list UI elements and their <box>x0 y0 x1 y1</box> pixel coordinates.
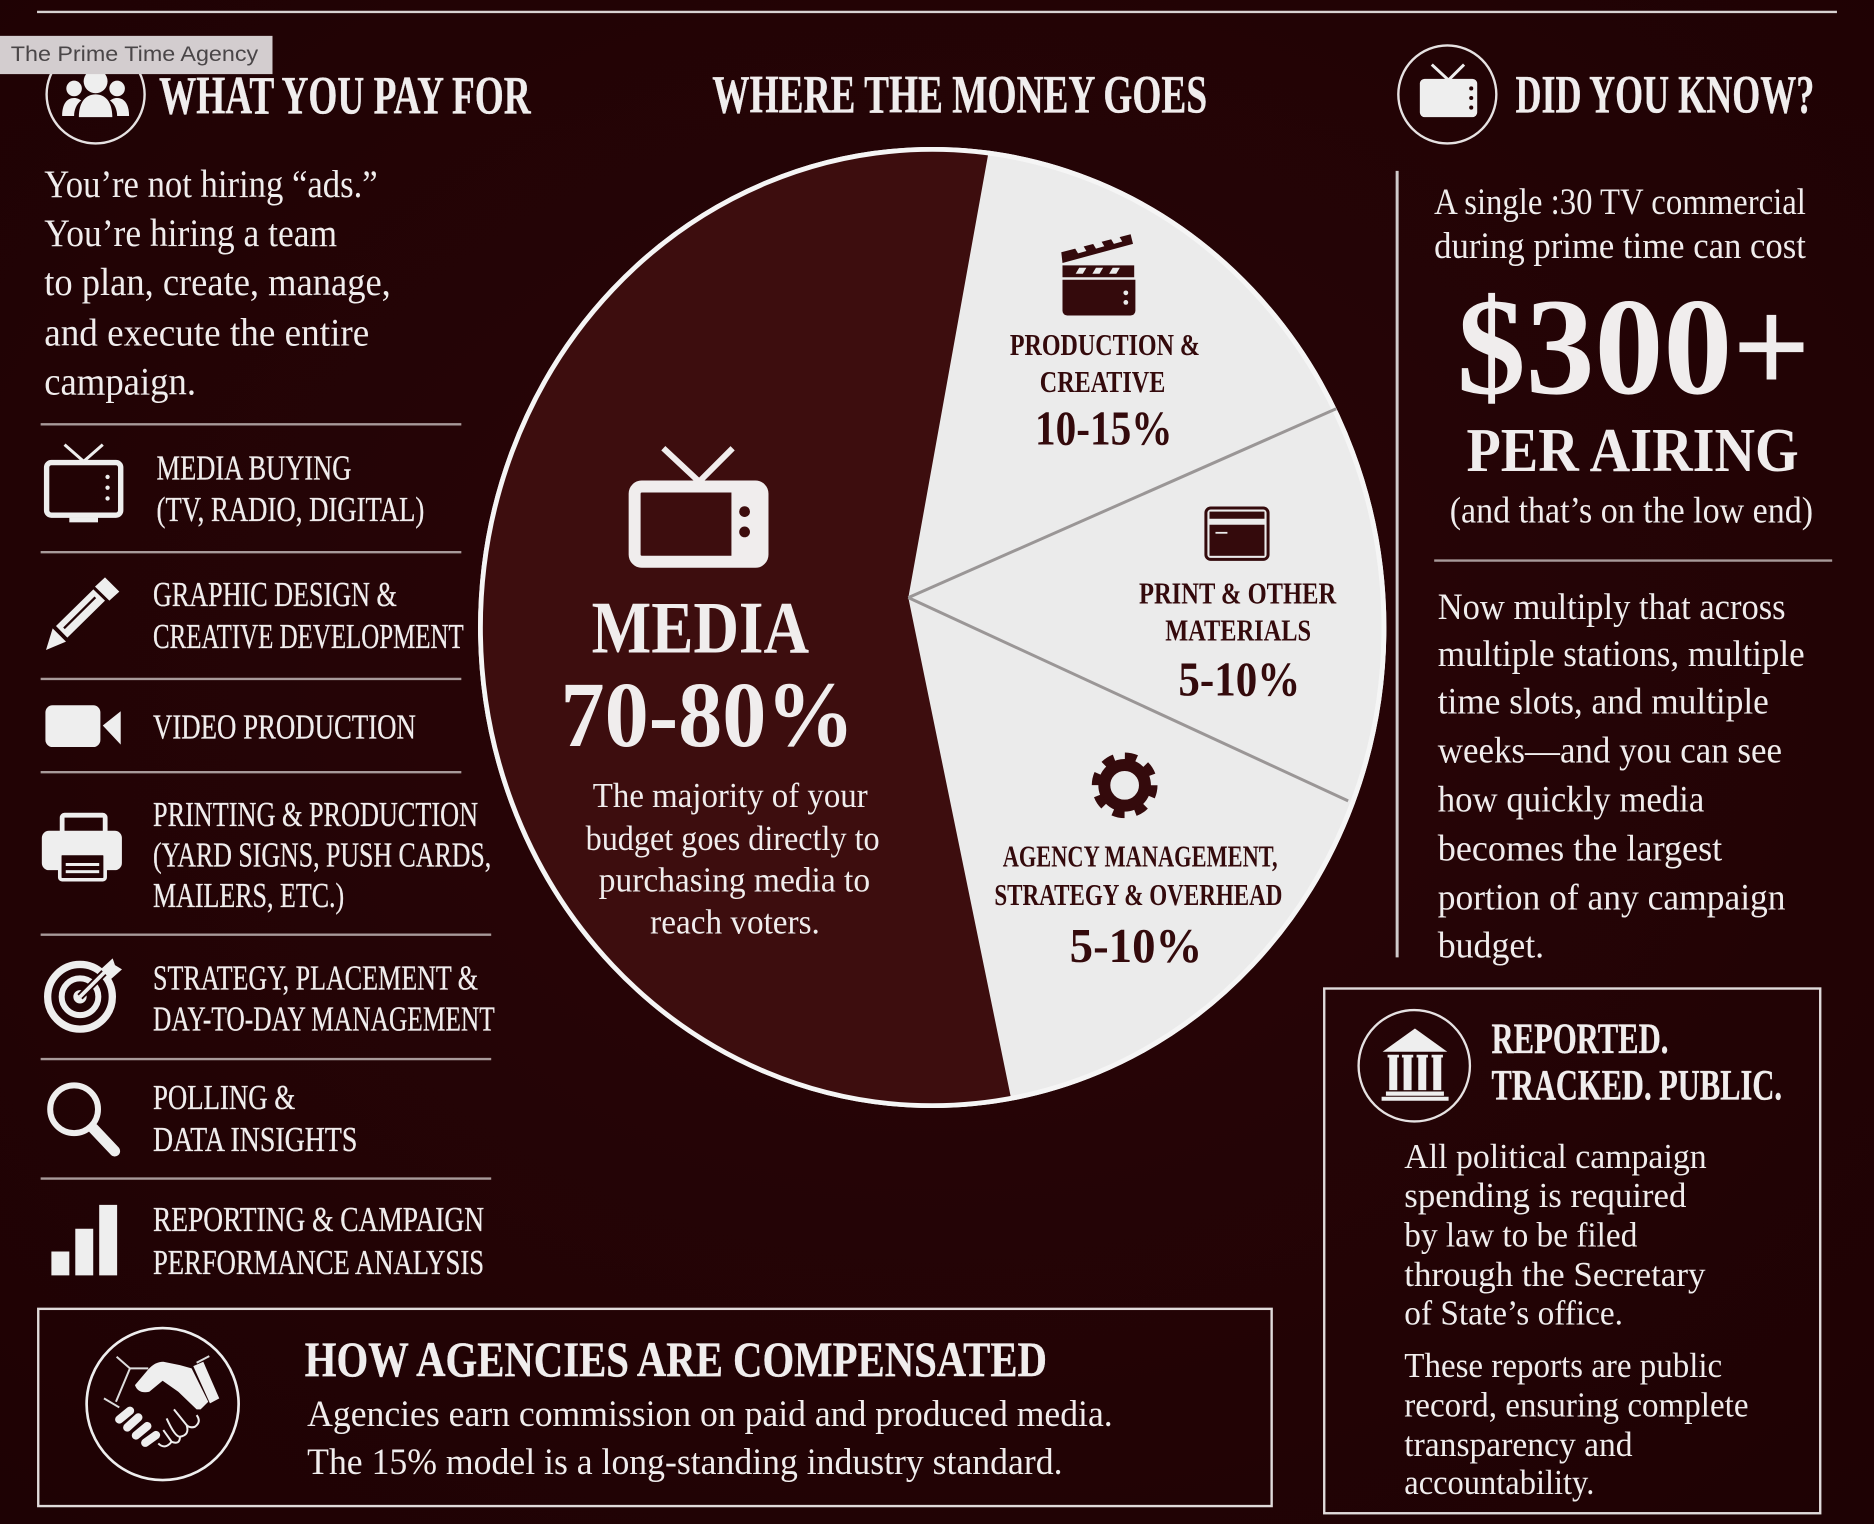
text: legal filing: All political campaign <box>1404 1138 1707 1176</box>
item: graphic design <box>46 576 464 656</box>
media description: purchasing media to <box>599 862 870 900</box>
slice: agency management: 5-10% <box>1070 918 1202 973</box>
item: graphic design: GRAPHIC DESIGN & <box>153 576 397 614</box>
media description <box>586 777 880 942</box>
heading: reported tracked public: REPORTED. <box>1492 1016 1668 1063</box>
item: media buying: MEDIA BUYING <box>157 449 351 487</box>
media description: reach voters. <box>650 904 820 942</box>
item: reporting: PERFORMANCE ANALYSIS <box>153 1244 484 1282</box>
slice: production and creative: CREATIVE <box>1040 364 1165 399</box>
text: public record <box>1404 1347 1749 1502</box>
icon: bar chart <box>51 1205 117 1275</box>
item: printing <box>42 796 491 915</box>
media description: The majority of your <box>593 777 868 815</box>
icon: camera <box>45 705 121 747</box>
text: multiply explanation: how quickly media <box>1438 780 1704 821</box>
text: legal filing: by law to be filed <box>1404 1217 1637 1255</box>
item: media buying <box>47 445 424 529</box>
wedge: media <box>481 149 1011 1106</box>
value: media percent: 70-80% <box>561 664 855 767</box>
slice: agency management: STRATEGY & OVERHEAD <box>994 877 1282 912</box>
item: media buying: (TV, RADIO, DIGITAL) <box>157 491 424 529</box>
heading: reported tracked public <box>1492 1016 1782 1110</box>
panel: what you pay for <box>41 45 531 1282</box>
slice: production and creative <box>1010 234 1200 456</box>
text: public record: accountability. <box>1404 1464 1594 1502</box>
intro text: campaign. <box>44 359 196 403</box>
text: commercial cost: during prime time can cost <box>1434 226 1807 267</box>
panel: how agencies are compensated <box>38 1309 1272 1506</box>
icon: target <box>48 958 122 1029</box>
source label <box>0 36 272 74</box>
icon: government building <box>1359 1010 1470 1121</box>
intro text <box>44 162 391 403</box>
slice: agency management: AGENCY MANAGEMENT, <box>1003 839 1278 874</box>
text: commission model: The 15% model is a long-standing industry standard. <box>307 1442 1062 1483</box>
panel: reported tracked public <box>1324 989 1820 1513</box>
big number: $300+: $300+ <box>1457 269 1811 423</box>
icon: people in circle <box>47 45 145 143</box>
text: multiply explanation: multiple stations, multiple <box>1438 634 1805 675</box>
item: reporting: REPORTING & CAMPAIGN <box>153 1201 484 1239</box>
icon: pencil <box>46 577 119 650</box>
item: video production: VIDEO PRODUCTION <box>153 709 416 747</box>
source label: The Prime Time Agency <box>11 42 258 66</box>
slice: print and other materials: MATERIALS <box>1165 613 1311 648</box>
text: multiply explanation: Now multiply that across <box>1438 587 1786 628</box>
item: polling: DATA INSIGHTS <box>153 1121 357 1159</box>
text: multiply explanation: time slots, and multiple <box>1438 682 1769 723</box>
slice: production and creative: PRODUCTION & <box>1010 327 1200 362</box>
media description: budget goes directly to <box>586 820 880 858</box>
label: media: MEDIA <box>592 588 809 670</box>
pie chart <box>480 149 1384 1106</box>
item: printing: PRINTING & PRODUCTION <box>153 796 478 834</box>
icon: media tv <box>635 448 763 562</box>
icon: tv <box>47 445 121 522</box>
text: commercial cost <box>1434 182 1807 267</box>
text: legal filing: spending is required <box>1404 1177 1686 1215</box>
item: printing: MAILERS, ETC.) <box>153 877 344 915</box>
text: public record: transparency and <box>1404 1426 1633 1464</box>
slice: print and other materials: 5-10% <box>1178 652 1300 707</box>
note: low end: (and that’s on the low end) <box>1450 490 1813 531</box>
item: video production <box>45 705 416 747</box>
item: strategy: DAY-TO-DAY MANAGEMENT <box>153 1000 495 1038</box>
heading: what you pay for: WHAT YOU PAY FOR <box>159 66 531 126</box>
item: polling <box>50 1079 357 1159</box>
label: per airing: PER AIRING <box>1466 417 1799 485</box>
text: commission model <box>307 1394 1113 1483</box>
slice: print and other materials: PRINT & OTHER <box>1139 576 1337 611</box>
text: multiply explanation <box>1438 587 1805 966</box>
intro text: to plan, create, manage, <box>44 260 391 304</box>
slice: agency management <box>994 757 1282 973</box>
intro text: and execute the entire <box>44 310 369 354</box>
item: graphic design: CREATIVE DEVELOPMENT <box>153 618 464 656</box>
intro text: You’re hiring a team <box>44 211 337 255</box>
text: multiply explanation: becomes the largest <box>1438 829 1723 870</box>
icon: print card <box>1206 508 1268 559</box>
heading: how agencies are compensated: HOW AGENCIES ARE COMPENSATED <box>305 1331 1047 1387</box>
text: commercial cost: A single :30 TV commercial <box>1434 182 1806 223</box>
panel: did you know <box>1397 45 1832 966</box>
icon: handshake <box>87 1328 239 1480</box>
item: polling: POLLING & <box>153 1079 295 1117</box>
item: printing: (YARD SIGNS, PUSH CARDS, <box>153 837 491 875</box>
icon: magnifier <box>50 1085 115 1151</box>
text: multiply explanation: weeks—and you can see <box>1438 731 1782 772</box>
text: legal filing: through the Secretary <box>1404 1256 1706 1294</box>
text: public record: record, ensuring complete <box>1404 1386 1749 1424</box>
heading: where the money goes: WHERE THE MONEY GOES <box>712 64 1207 124</box>
text: commission model: Agencies earn commission on paid and produced media. <box>307 1394 1113 1435</box>
icon: clapperboard <box>1061 234 1135 316</box>
icon: gear <box>1096 757 1153 814</box>
intro text: You’re not hiring “ads.” <box>44 162 378 206</box>
item: reporting <box>51 1201 484 1282</box>
item: strategy <box>48 958 495 1038</box>
icon: tv in circle <box>1398 45 1496 143</box>
text: public record: These reports are public <box>1404 1347 1722 1385</box>
slice: production and creative: 10-15% <box>1035 401 1172 456</box>
text: legal filing <box>1404 1138 1707 1332</box>
item: strategy: STRATEGY, PLACEMENT & <box>153 960 478 998</box>
slice: print and other materials <box>1139 508 1337 707</box>
text: legal filing: of State’s office. <box>1404 1294 1623 1332</box>
text: multiply explanation: portion of any campaign <box>1438 878 1786 919</box>
icon: printer <box>42 815 122 880</box>
text: multiply explanation: budget. <box>1438 925 1544 966</box>
